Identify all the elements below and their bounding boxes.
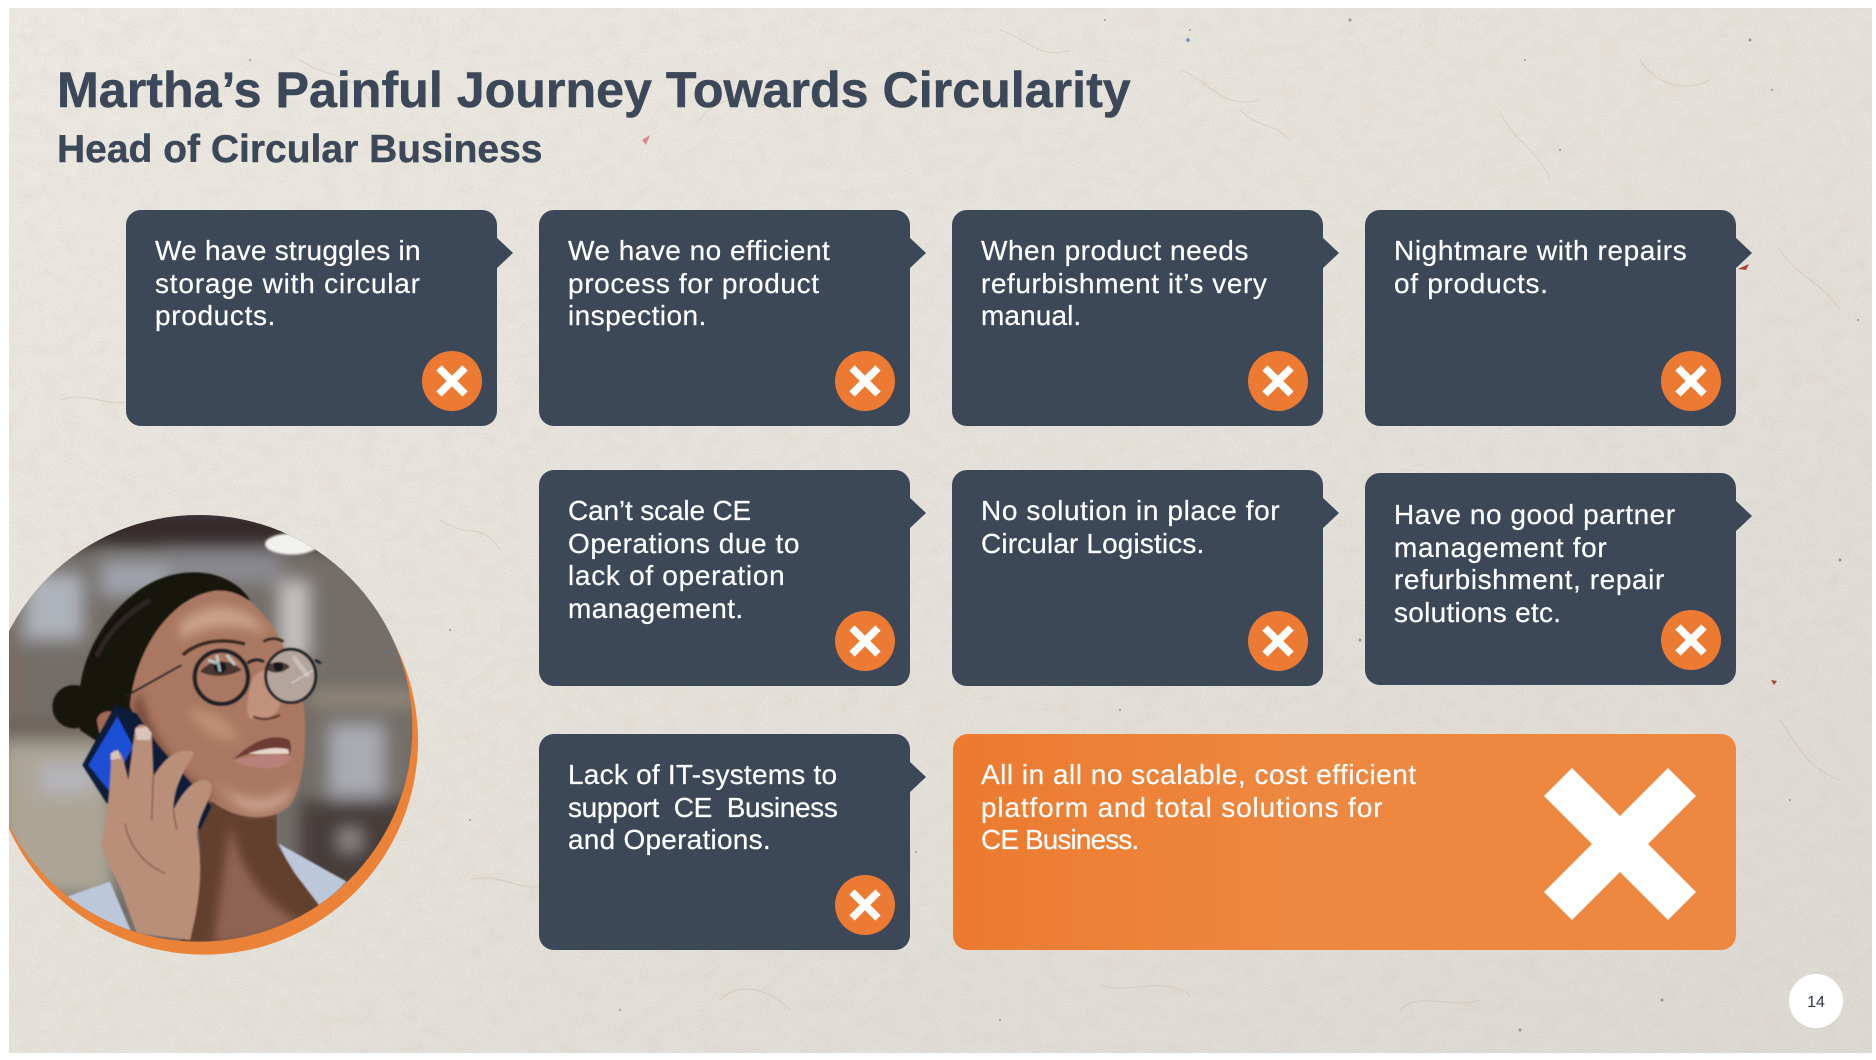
card: partner management: refurbishment, repair <box>1394 564 1665 595</box>
photo: woman with glasses on the phone, with orange ring <box>9 515 418 955</box>
card: repairs nightmare <box>1365 210 1752 426</box>
card: cannot scale operations <box>539 470 926 686</box>
card: IT systems: and Operations. <box>568 824 771 855</box>
card: inspection process: We have no efficient <box>568 235 830 266</box>
card: repairs nightmare: of products. <box>1394 268 1549 299</box>
card: IT systems <box>539 734 926 950</box>
card: partner management: Have no good partner <box>1394 499 1676 530</box>
card: manual refurbishment: manual. <box>981 300 1081 331</box>
phone <box>82 705 212 830</box>
card: storage struggles <box>126 210 513 426</box>
card: cannot scale operations: Operations due to <box>568 528 800 559</box>
card: manual refurbishment: refurbishment it’s very <box>981 268 1267 299</box>
shirt <box>67 843 347 937</box>
card: partner management: management for <box>1394 532 1607 563</box>
card: storage struggles: products. <box>155 300 276 331</box>
eyes <box>200 661 242 676</box>
page number badge: 14 <box>1807 994 1825 1011</box>
card: circular logistics: Circular Logistics. <box>981 528 1204 559</box>
card: inspection process: inspection. <box>568 300 707 331</box>
face <box>130 591 305 817</box>
lenses <box>267 650 315 702</box>
card: manual refurbishment <box>952 210 1339 426</box>
card: inspection process: process for product <box>568 268 820 299</box>
title: Martha’s Painful Journey Towards Circularity <box>57 62 1131 118</box>
card: inspection process <box>539 210 926 426</box>
neck <box>180 800 322 943</box>
card: storage struggles: We have struggles in <box>155 235 421 266</box>
card: partner management <box>1365 473 1752 685</box>
card: cannot scale operations: management. <box>568 593 744 624</box>
conclusion card: orange summary: platform and total solutions for <box>981 792 1383 823</box>
subtitle: Head of Circular Business <box>57 128 542 171</box>
conclusion card: orange summary: CE Business. <box>981 824 1138 855</box>
hand <box>102 725 212 940</box>
conclusion card: orange summary <box>953 734 1736 950</box>
card: repairs nightmare: Nightmare with repairs <box>1394 235 1687 266</box>
orange ring <box>9 642 418 955</box>
card: circular logistics: No solution in place for <box>981 495 1280 526</box>
hair and bun <box>52 572 250 743</box>
card: manual refurbishment: When product needs <box>981 235 1249 266</box>
card: IT systems: Lack of IT-systems to <box>568 759 837 790</box>
conclusion card: orange summary: All in all no scalable, cost efficient <box>981 759 1417 790</box>
card: circular logistics <box>952 470 1339 686</box>
nose <box>247 670 281 719</box>
page number badge <box>1789 974 1843 1028</box>
card: partner management: solutions etc. <box>1394 597 1561 628</box>
card: storage struggles: storage with circular <box>155 268 421 299</box>
glasses <box>125 649 321 704</box>
card: IT systems: support CE Business <box>568 792 837 823</box>
ceiling light <box>265 533 318 555</box>
lips <box>233 737 291 759</box>
card: cannot scale operations: Can’t scale CE <box>568 495 751 526</box>
eyebrows <box>183 641 245 655</box>
card: cannot scale operations: lack of operation <box>568 560 785 591</box>
ear <box>96 710 112 734</box>
